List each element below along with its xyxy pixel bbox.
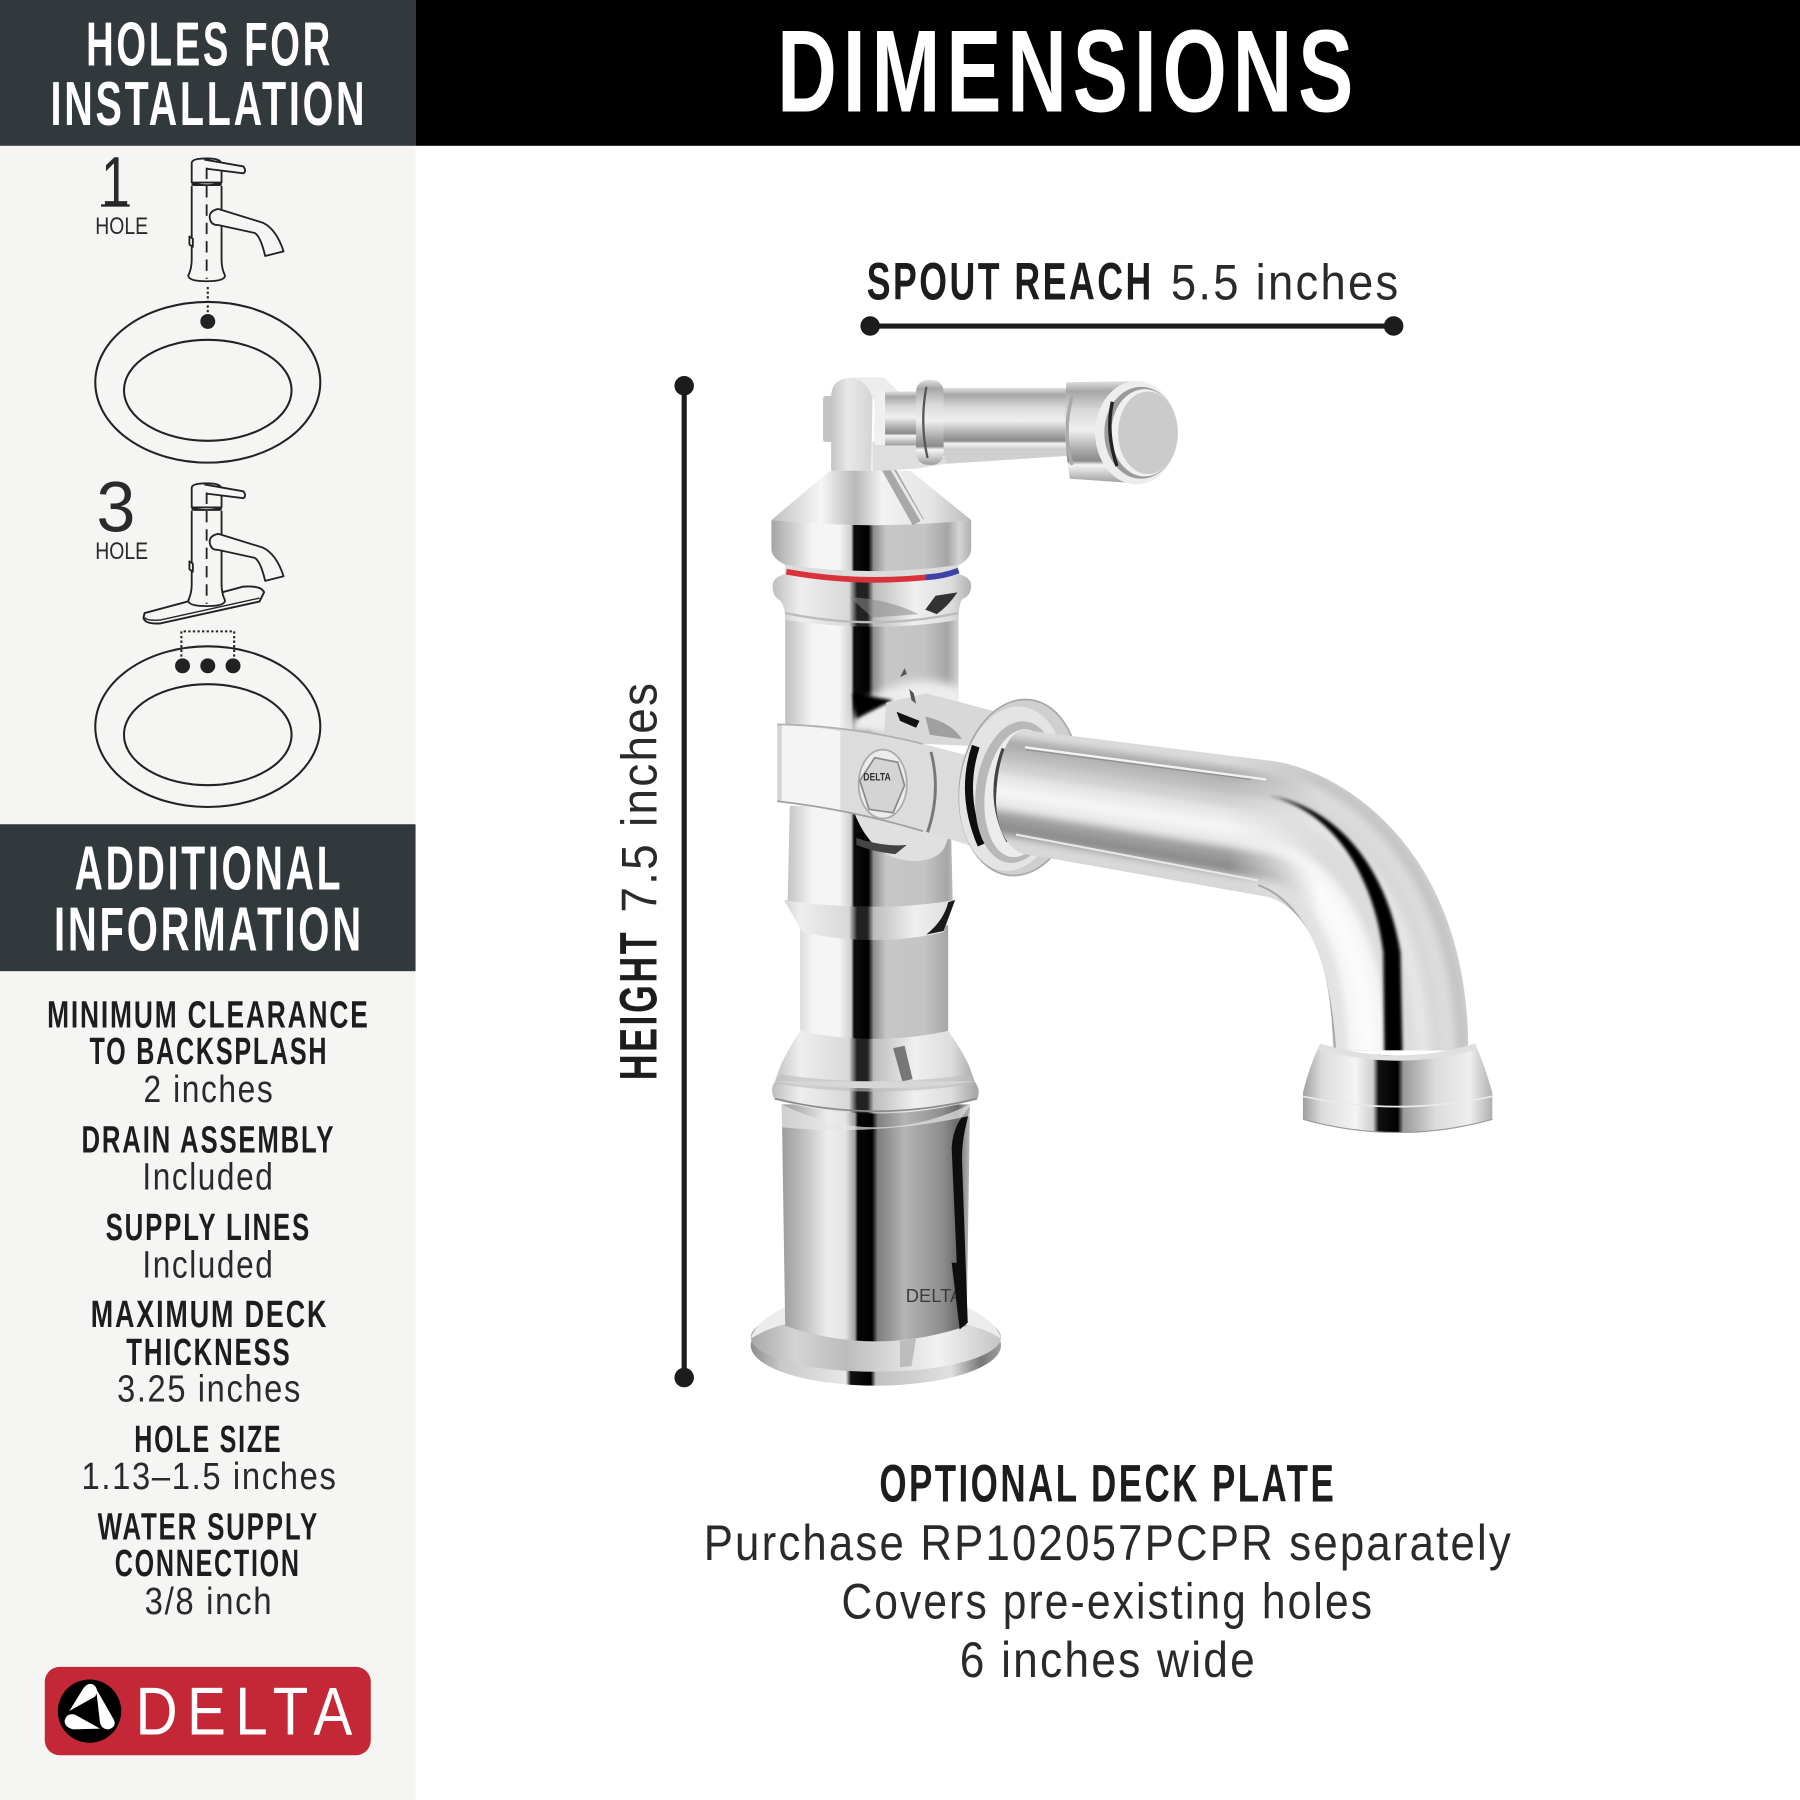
spec: water supply connection: CONNECTION (115, 1543, 301, 1585)
faucet lever handle (823, 378, 1178, 484)
spec: minimum clearance: TO BACKSPLASH (90, 1031, 328, 1073)
spec: maximum deck thickness: THICKNESS (126, 1332, 292, 1374)
spec: hole size: 1.13–1.5 inches (82, 1456, 338, 1498)
product: chrome faucet (751, 378, 1492, 1386)
logo: Delta (45, 1667, 371, 1755)
dimension: height: 7.5 inches (611, 681, 668, 913)
dimension: spout reach: SPOUT REACH (867, 253, 1154, 312)
faucet spout flange (949, 692, 1089, 883)
dimension: spout reach (860, 253, 1403, 336)
title bar: DIMENSIONS (416, 0, 1800, 146)
diagram: 3 hole installation (95, 469, 320, 807)
heading: additional information (0, 824, 416, 971)
heading: additional information: ADDITIONAL (75, 835, 343, 904)
spec: drain assembly: Included (142, 1156, 274, 1198)
spec list (47, 994, 370, 1623)
faucet lower body: DELTA (906, 1285, 963, 1306)
diagram: 1 hole installation: HOLE (95, 213, 148, 240)
faucet lower body (782, 1104, 970, 1341)
dimension: height (610, 376, 694, 1387)
spec: supply lines: SUPPLY LINES (106, 1207, 311, 1249)
spec: minimum clearance: MINIMUM CLEARANCE (47, 994, 370, 1036)
faucet base (751, 1303, 1001, 1386)
text block: optional deck plate: 6 inches wide (960, 1631, 1257, 1688)
faucet middle section (772, 806, 979, 1114)
faucet spout tube (996, 730, 1468, 1050)
text block: optional deck plate: Covers pre-existing holes (841, 1573, 1374, 1630)
dimension: spout reach: 5.5 inches (1171, 254, 1401, 311)
diagram: 3 hole installation: HOLE (95, 538, 148, 565)
spec: minimum clearance (47, 994, 370, 1111)
diagram: 1 hole installation (95, 144, 320, 463)
spec: water supply connection: 3/8 inch (145, 1581, 273, 1623)
spec: supply lines (106, 1207, 311, 1287)
spec: maximum deck thickness: 3.25 inches (117, 1369, 302, 1411)
heading: holes for installation (0, 0, 416, 146)
heading: holes for installation: HOLES FOR (86, 10, 333, 79)
panel: left sidebar (0, 0, 416, 1800)
spec: maximum deck thickness (91, 1294, 328, 1411)
dimension: height: HEIGHT (610, 930, 669, 1080)
hot and cold indicator ring (786, 571, 959, 580)
text block: optional deck plate (704, 1455, 1513, 1688)
spec: hole size (82, 1419, 338, 1498)
faucet spout tip (1303, 1043, 1492, 1132)
text block: optional deck plate: Purchase RP102057PCPR separately (704, 1514, 1513, 1571)
spec: drain assembly: DRAIN ASSEMBLY (82, 1120, 335, 1162)
diagram: 1 hole installation: 1 (101, 144, 130, 223)
spec: water supply connection: WATER SUPPLY (98, 1506, 319, 1548)
spec: maximum deck thickness: MAXIMUM DECK (91, 1294, 328, 1336)
spec: hole size: HOLE SIZE (134, 1419, 282, 1461)
spec: minimum clearance: 2 inches (143, 1069, 274, 1111)
text block: optional deck plate: OPTIONAL DECK PLATE (879, 1455, 1336, 1514)
title bar: DIMENSIONS: DIMENSIONS (777, 5, 1359, 136)
heading: holes for installation: INSTALLATION (51, 70, 367, 139)
logo: Delta: DELTA (135, 1675, 362, 1750)
faucet upper body and collar (771, 457, 971, 735)
faucet clamp and hex bolt (777, 668, 996, 861)
spec: drain assembly (82, 1120, 335, 1198)
heading: additional information: INFORMATION (54, 896, 364, 965)
diagram: 3 hole installation: 3 (96, 469, 135, 548)
spec: water supply connection (98, 1506, 319, 1623)
faucet clamp and hex bolt: DELTA (863, 772, 891, 784)
spec: supply lines: Included (142, 1245, 274, 1287)
